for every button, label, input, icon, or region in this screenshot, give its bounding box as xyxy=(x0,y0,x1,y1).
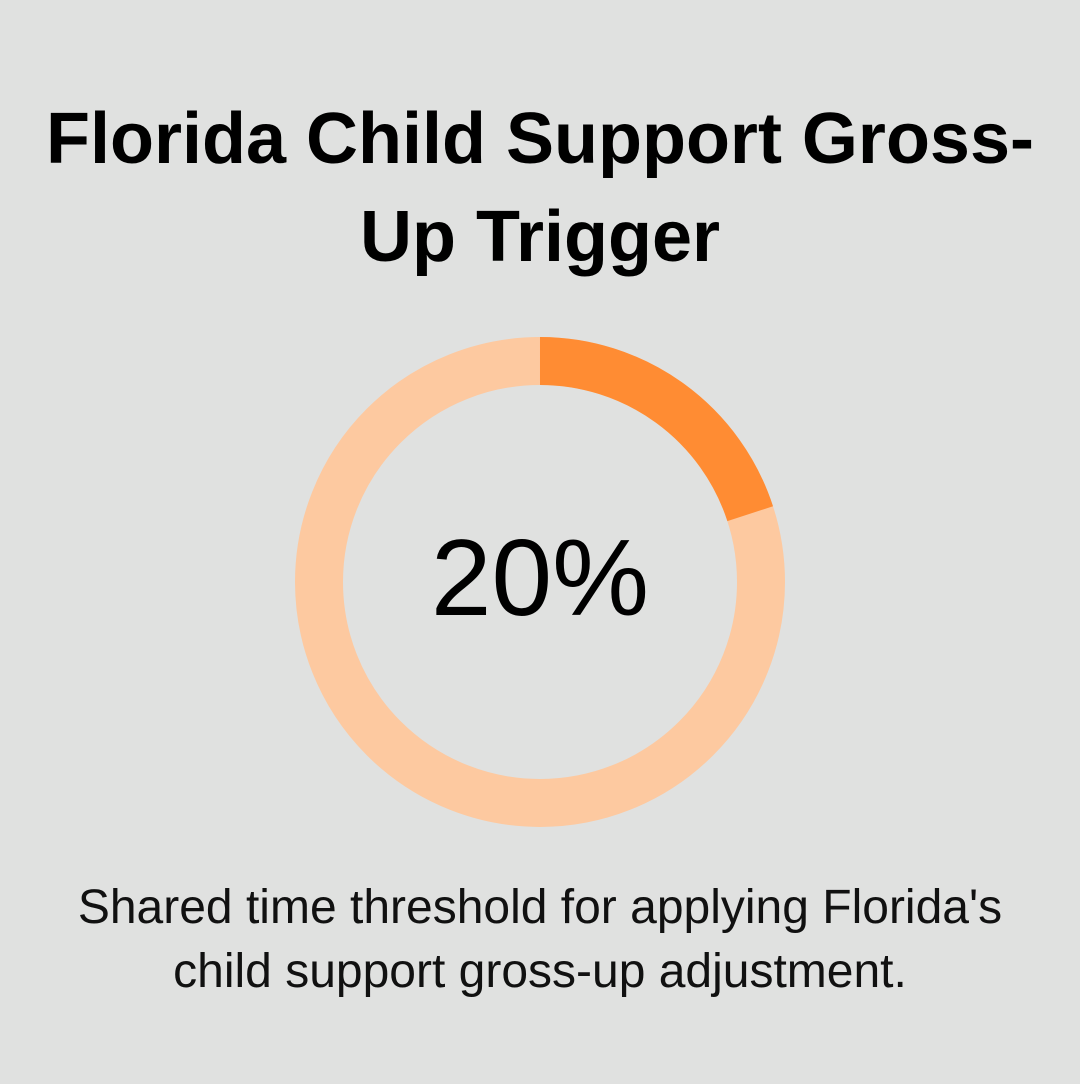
caption: child support gross-up adjustment. xyxy=(173,945,907,998)
center value: 20% xyxy=(431,517,649,639)
title xyxy=(46,99,1034,277)
ring segment 20% xyxy=(540,361,750,514)
caption xyxy=(78,881,1002,998)
title: Up Trigger xyxy=(360,197,720,277)
ring background xyxy=(319,361,761,803)
caption: Shared time threshold for applying Florida's xyxy=(78,881,1002,934)
title: Florida Child Support Gross- xyxy=(46,99,1034,179)
